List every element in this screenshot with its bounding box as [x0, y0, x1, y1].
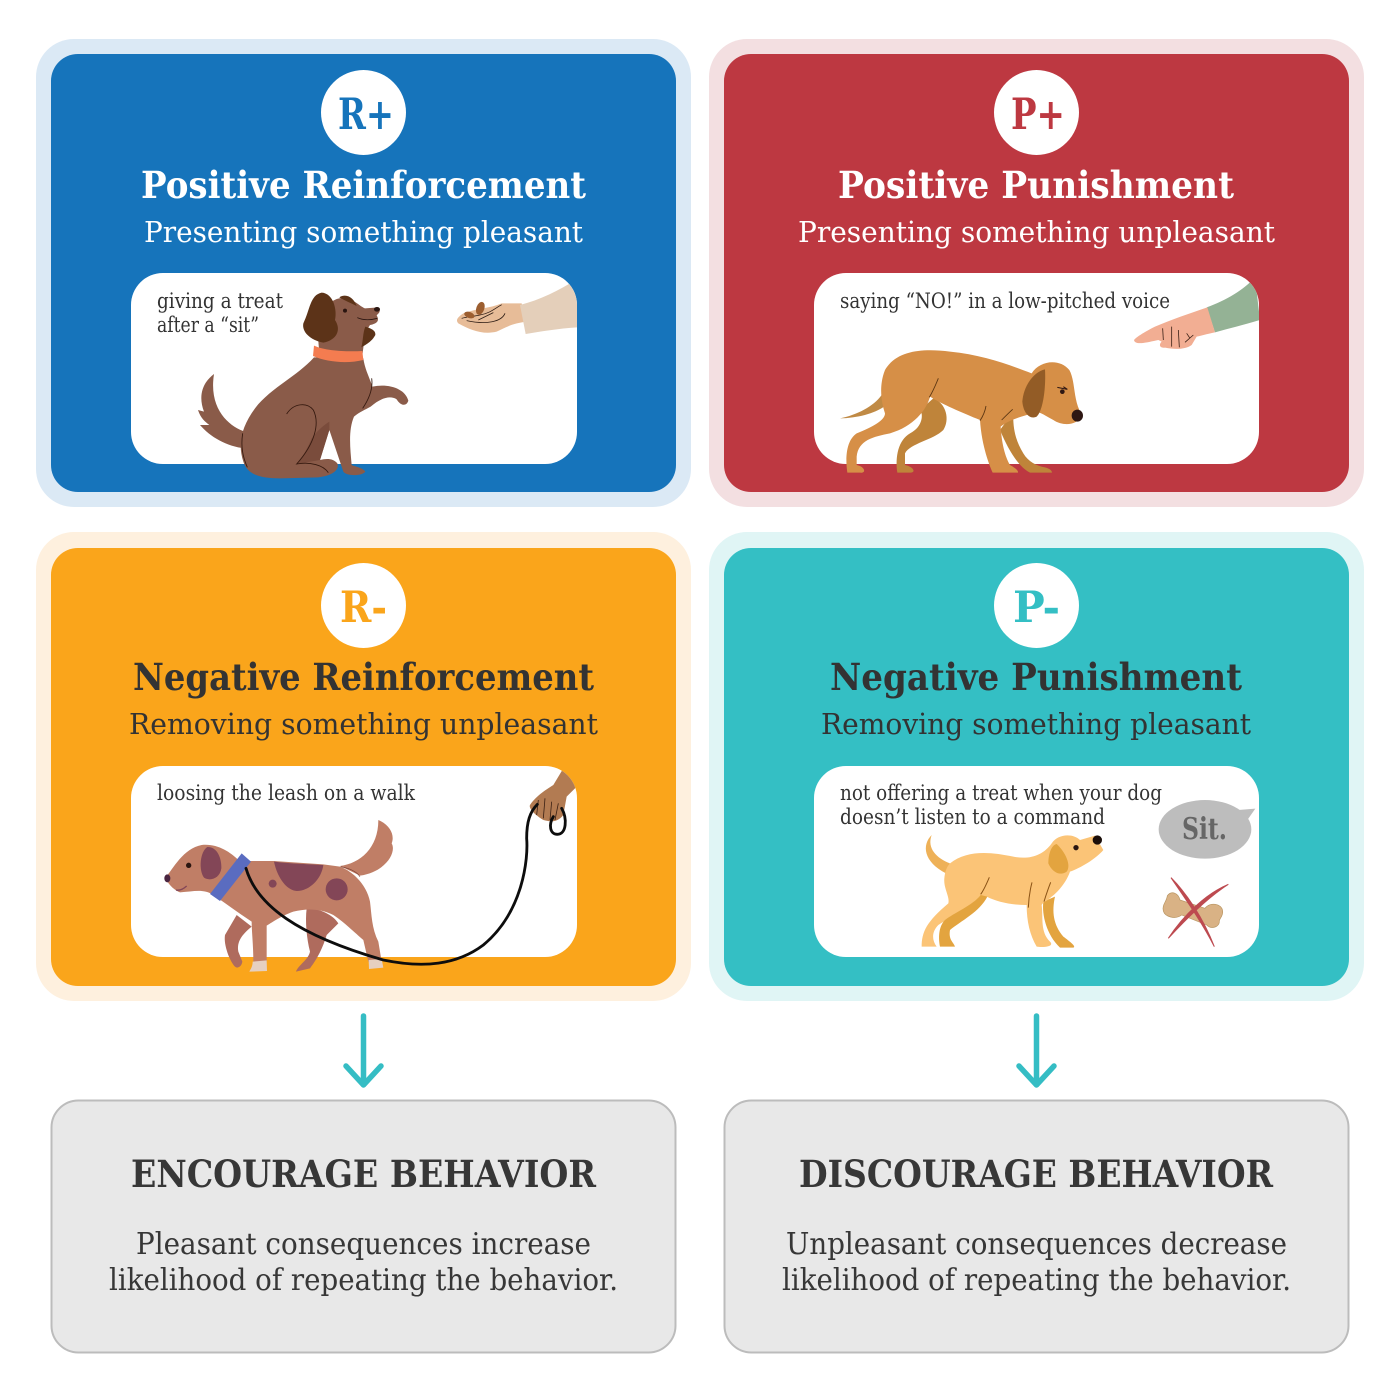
example caption: doesn’t listen to a command	[840, 805, 1105, 830]
badge: R-: R-	[340, 583, 387, 633]
panel: positive punishment	[709, 39, 1364, 507]
icon: walking spotted dog	[164, 820, 393, 972]
badge: P+	[994, 70, 1079, 155]
arrow: punishment to discourage	[1019, 1016, 1054, 1085]
heading: Positive Reinforcement: Positive Reinforcement	[141, 163, 586, 207]
icon: hand holding leash	[530, 768, 578, 821]
icon: crossed-out bone	[1163, 878, 1228, 947]
example box	[814, 766, 1259, 957]
panel: positive reinforcement	[36, 39, 691, 507]
example caption: loosing the leash on a walk	[157, 781, 416, 806]
icon: standing yellow dog	[922, 835, 1103, 948]
icon: cowering tan dog	[840, 350, 1083, 473]
badge: P-: P-	[1013, 583, 1060, 633]
panel: encourage behavior	[52, 1100, 676, 1352]
heading: encourage behavior: ENCOURAGE BEHAVIOR	[131, 1152, 596, 1196]
badge: R-	[321, 563, 406, 648]
example caption: giving a treat	[157, 289, 283, 314]
heading: Positive Punishment: Positive Punishment	[838, 163, 1234, 207]
example box	[131, 273, 577, 464]
badge: P-	[994, 563, 1079, 648]
subtitle: Removing something unpleasant	[129, 707, 598, 741]
example caption	[840, 781, 1162, 830]
badge: P+: P+	[1011, 90, 1065, 140]
heading: discourage behavior: DISCOURAGE BEHAVIOR	[799, 1152, 1273, 1196]
body text	[782, 1227, 1291, 1297]
icon: pointing hand	[1134, 277, 1260, 349]
panel: negative reinforcement	[36, 532, 691, 1001]
icon: sitting brown dog	[198, 293, 408, 478]
heading: Negative Reinforcement: Negative Reinforcement	[133, 655, 594, 699]
badge: R+	[321, 70, 406, 155]
example caption: saying “NO!” in a low-pitched voice	[840, 289, 1170, 314]
body text	[109, 1227, 618, 1297]
icon: speech bubble Sit.	[1159, 800, 1255, 859]
subtitle: Presenting something pleasant	[144, 215, 583, 249]
arrow: reinforcement to encourage	[346, 1016, 381, 1085]
example box	[814, 273, 1259, 464]
example caption	[157, 289, 283, 338]
subtitle: Removing something pleasant	[821, 707, 1251, 741]
subtitle: Presenting something unpleasant	[798, 215, 1275, 249]
icon: speech bubble Sit.: Sit.	[1182, 812, 1227, 847]
body text: likelihood of repeating the behavior.	[782, 1263, 1291, 1297]
panel: negative punishment	[709, 532, 1364, 1001]
body text: Unpleasant consequences decrease	[786, 1227, 1287, 1261]
leash	[246, 804, 565, 964]
body text: likelihood of repeating the behavior.	[109, 1263, 618, 1297]
heading: Negative Punishment: Negative Punishment	[830, 655, 1242, 699]
badge: R+: R+	[338, 90, 394, 140]
example caption: not offering a treat when your dog	[840, 781, 1162, 806]
icon: hand offering treat	[457, 284, 577, 334]
example box	[131, 766, 577, 957]
body text: Pleasant consequences increase	[136, 1227, 591, 1261]
example caption: after a “sit”	[157, 313, 259, 338]
panel: discourage behavior	[724, 1100, 1348, 1352]
